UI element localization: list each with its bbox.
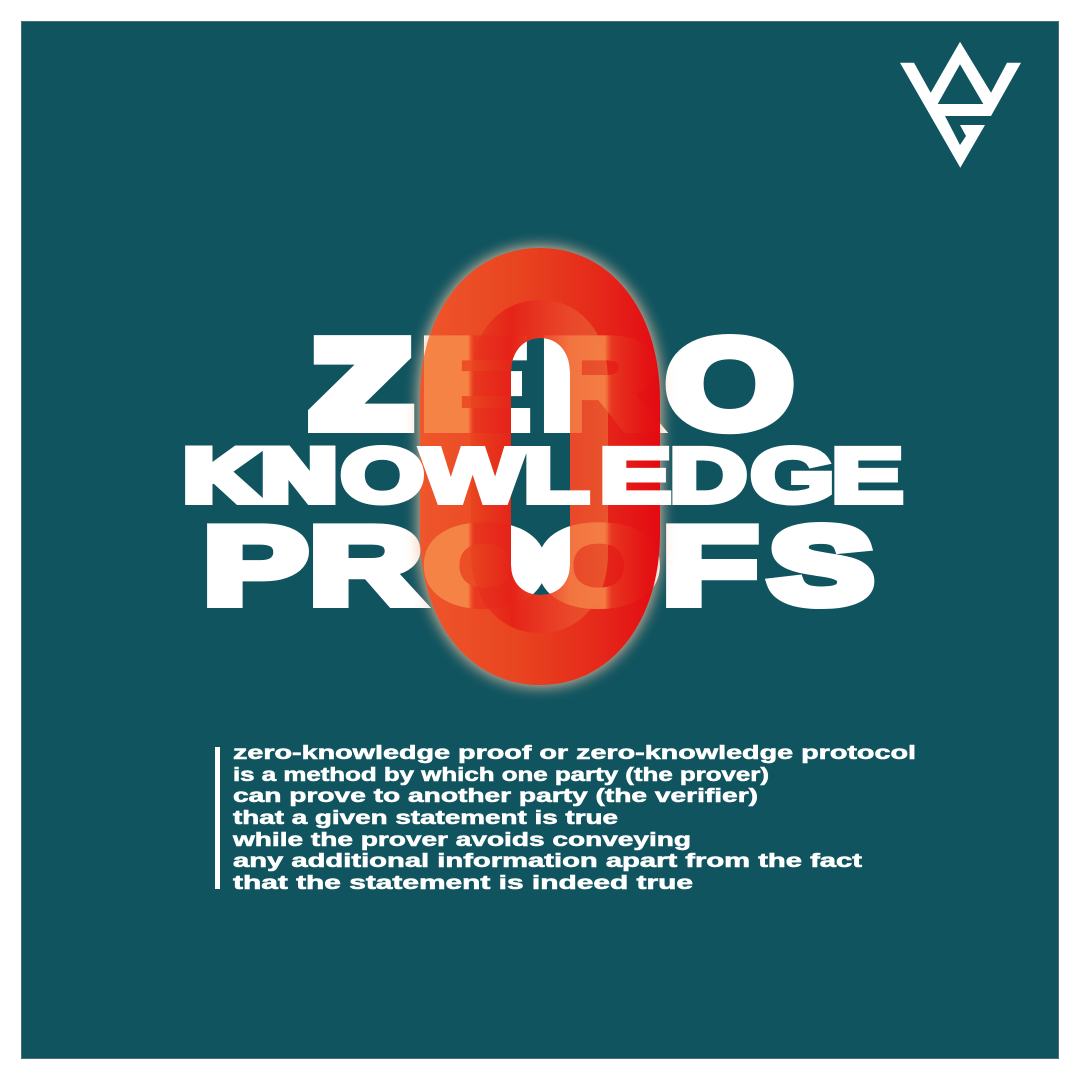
description rule	[215, 747, 220, 889]
zero outer ring	[420, 248, 660, 685]
description text: that a given statement is true	[233, 808, 618, 829]
description text	[232, 743, 916, 894]
description text: zero-knowledge proof or zero-knowledge protocol	[233, 743, 916, 764]
heading word: KNOWLEDGE: OWLEDGE	[341, 432, 903, 518]
letters seen through zero	[424, 335, 659, 610]
zero inner band	[471, 300, 608, 633]
heading words: PROOFS (white base): S	[770, 506, 873, 626]
icon: logo	[900, 42, 1021, 168]
description text: that the statement is indeed true	[233, 873, 693, 894]
zero glow	[420, 248, 660, 685]
icon: big red zero with glow	[415, 248, 665, 685]
heading words: ZERO (white base): R	[540, 314, 658, 454]
description text: any additional information apart from the fact	[233, 851, 863, 872]
description text: is a method by which one party (the prover)	[233, 765, 769, 786]
heading words: ZERO (white base): Z	[314, 318, 408, 451]
heading words: ZERO (white base): E	[420, 314, 529, 454]
heading words: ZERO (white base): O	[666, 314, 793, 454]
heading word: KNOWLEDGE: K	[185, 435, 258, 516]
heading words: PROOFS (white base): PROOF	[203, 504, 758, 627]
description text: can prove to another party (the verifier)	[233, 786, 758, 807]
description text: while the prover avoids conveying	[232, 830, 691, 851]
heading word: KNOWLEDGE: N	[262, 435, 336, 516]
